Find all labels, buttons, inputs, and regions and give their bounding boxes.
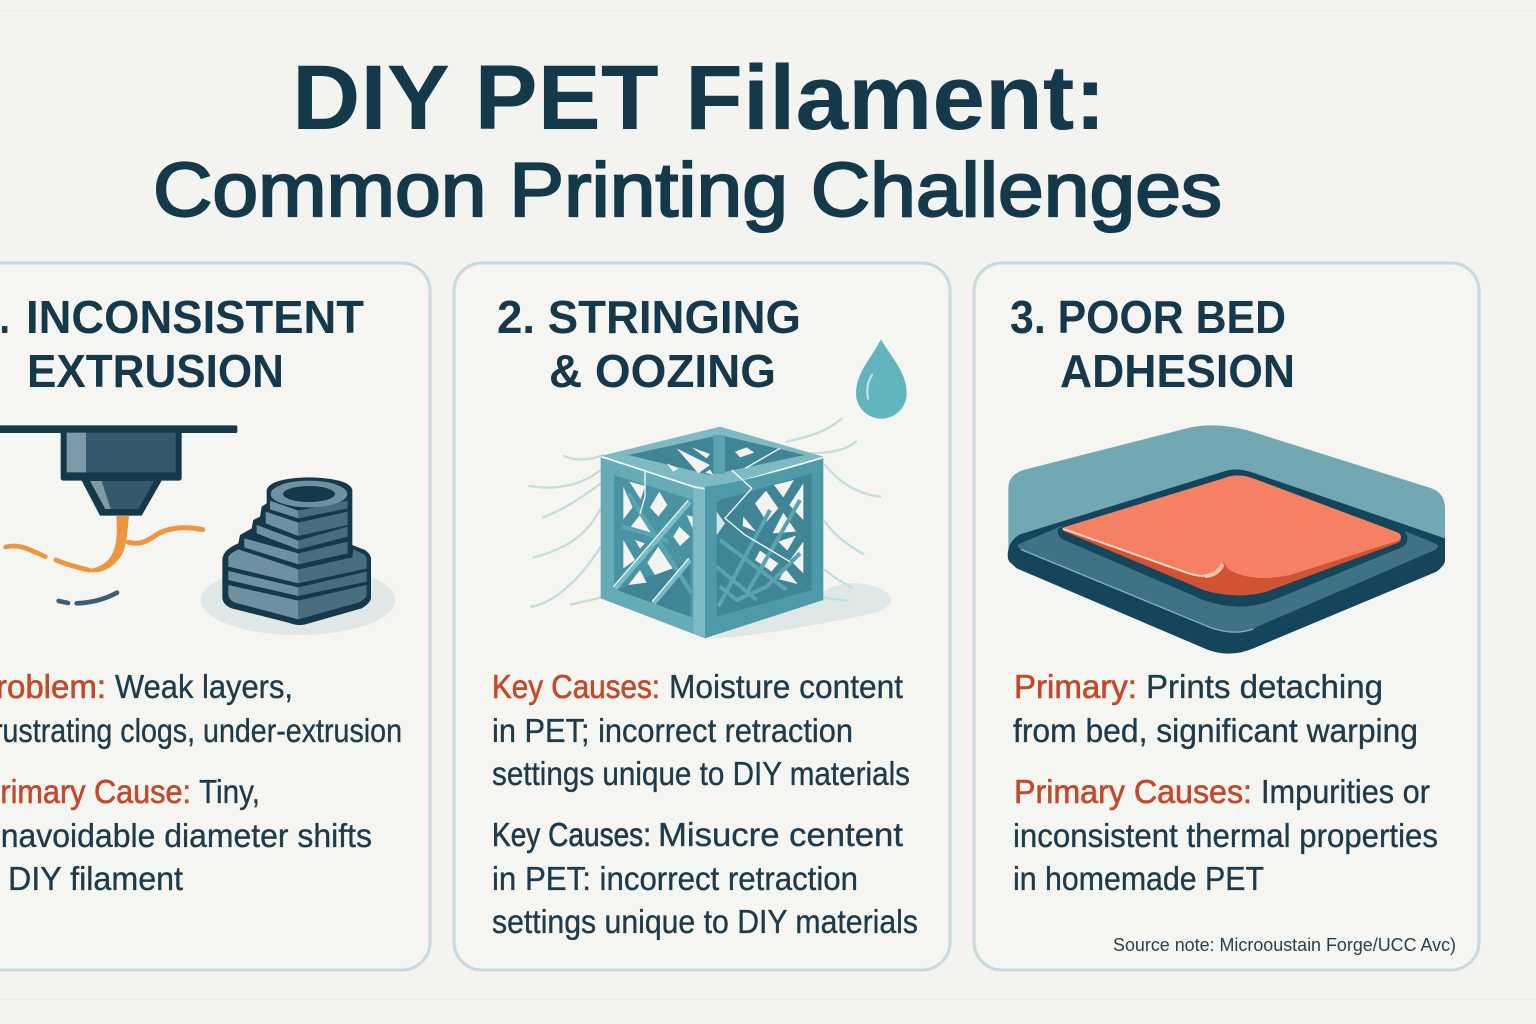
panel: inconsistent extrusion <box>0 263 430 970</box>
text block: key causes: Misucre centent <box>658 816 903 853</box>
icon: shadow under print <box>201 565 395 635</box>
text block: primary and primary causes: Impurities or <box>1261 773 1430 810</box>
heading: stringing and oozing <box>497 291 801 397</box>
icon: print bed with lifting sheet <box>1008 425 1445 654</box>
text block: primary and primary causes: from bed, significant warping <box>1013 712 1418 749</box>
icon: nozzle with broken filament <box>0 425 237 603</box>
title: DIY PET Filament: <box>292 47 1106 149</box>
text block: problem and primary cause: Tiny, <box>199 773 260 810</box>
heading: stringing and oozing: 2. STRINGING <box>497 291 801 343</box>
text block: key causes: Key Causes: <box>492 816 651 853</box>
text block: key causes: settings unique to DIY materials <box>492 903 918 940</box>
text block: primary and primary causes: Primary: <box>1014 668 1137 705</box>
icon: water drop <box>856 339 907 419</box>
cube left face <box>601 457 705 638</box>
heading: poor bed adhesion: ADHESION <box>1060 345 1295 397</box>
text block: primary and primary causes: inconsistent thermal properties <box>1013 817 1438 854</box>
heading: poor bed adhesion <box>1010 291 1295 397</box>
text block: primary and primary causes <box>1013 668 1438 897</box>
panel: stringing and oozing <box>454 263 950 970</box>
text block: problem and primary cause <box>0 668 402 897</box>
text block: key causes: Moisture content <box>669 668 903 705</box>
text block: key causes: Key Causes: <box>492 668 660 705</box>
cube right face <box>705 448 823 638</box>
text block: primary and primary causes: Prints detaching <box>1146 668 1383 705</box>
heading: inconsistent extrusion <box>0 291 364 397</box>
heading: inconsistent extrusion: EXTRUSION <box>27 345 284 397</box>
heading: inconsistent extrusion: INCONSISTENT <box>26 291 364 343</box>
text block: primary and primary causes: Primary Causes: <box>1014 773 1252 810</box>
text block: key causes: in PET: incorrect retraction <box>492 860 858 897</box>
text block: key causes: in PET; incorrect retraction <box>492 712 853 749</box>
icon: stepped uneven print <box>222 477 371 625</box>
heading: stringing and oozing: & OOZING <box>549 345 776 397</box>
text block: key causes <box>492 668 918 940</box>
icon: lattice cube with strings <box>529 418 891 638</box>
text block: problem and primary cause: Weak layers, <box>115 668 293 705</box>
heading: poor bed adhesion: 3. POOR BED <box>1010 291 1286 343</box>
title <box>153 47 1222 233</box>
text block: key causes: settings unique to DIY materials <box>492 755 910 792</box>
title: Common Printing Challenges <box>153 148 1222 233</box>
panel: poor bed adhesion <box>974 263 1479 970</box>
text block: primary and primary causes: in homemade PET <box>1013 860 1264 897</box>
source note: Source note: Microoustain Forge/UCC Avc) <box>1113 935 1456 955</box>
